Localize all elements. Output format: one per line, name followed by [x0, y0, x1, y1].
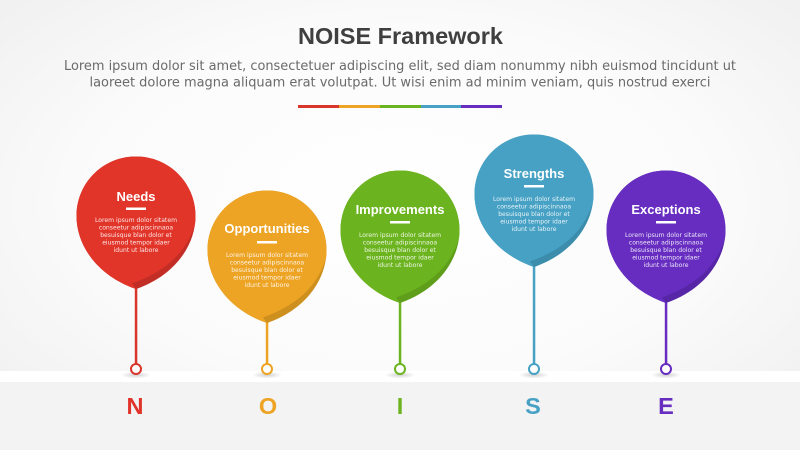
- acronym letters: [127, 393, 674, 419]
- panel: Improvements balloon: Improvements: [356, 202, 444, 217]
- panel: Opportunities balloon: [208, 190, 326, 378]
- panel: Opportunities balloon: Opportunities: [224, 221, 310, 236]
- panel: Exceptions balloon: Exceptions: [631, 202, 701, 217]
- subtitle text: [64, 59, 736, 90]
- panel: Opportunities balloon: eiusmod tempor idaer: [233, 274, 301, 282]
- panel: Strengths balloon: Lorem ipsum dolor sitatem: [493, 196, 575, 203]
- panel: Exceptions balloon: conseetur adipiscinnaoa: [629, 240, 703, 246]
- panel: Opportunities balloon: idunt ut labore: [245, 282, 290, 289]
- panel: Needs balloon: Needs: [116, 189, 156, 204]
- panel: Improvements balloon: eiusmod tempor idaer: [366, 254, 434, 262]
- panel: Exceptions balloon: Lorem ipsum dolor sitatem: [625, 232, 707, 239]
- panel: Exceptions balloon: eiusmod tempor idaer: [632, 254, 700, 262]
- panel: Exceptions balloon: idunt ut labore: [644, 262, 689, 269]
- acronym letters: O: [259, 393, 277, 419]
- panel: Improvements balloon: Lorem ipsum dolor sitatem: [359, 232, 441, 239]
- panel: Exceptions balloon: [606, 170, 726, 378]
- panel: Needs balloon: idunt ut labore: [114, 247, 159, 254]
- panel: Needs balloon: Lorem ipsum dolor sitatem: [95, 217, 177, 224]
- panel: Needs balloon: [76, 156, 196, 378]
- multicolour title underline: [298, 105, 502, 108]
- acronym letters: I: [397, 393, 403, 419]
- subtitle text: laoreet dolore magna aliquam erat volutpat. Ut wisi enim ad minim veniam, quis nostrud exerci: [90, 76, 710, 90]
- panel: Strengths balloon: eiusmod tempor idaer: [500, 218, 568, 226]
- subtitle text: Lorem ipsum dolor sit amet, consectetuer adipiscing elit, sed diam nonummy nibh euismod tincidunt ut: [64, 59, 736, 74]
- acronym letters: E: [658, 393, 674, 419]
- panel: Improvements balloon: besuisque blan dolor et: [364, 247, 436, 254]
- panel: Improvements balloon: idunt ut labore: [378, 262, 423, 269]
- panel: Needs balloon: besuisque blan dolor et: [100, 232, 172, 239]
- panel: Strengths balloon: [474, 134, 594, 378]
- panel: Exceptions balloon: besuisque blan dolor et: [630, 247, 702, 254]
- panel: Opportunities balloon: Lorem ipsum dolor sitatem: [226, 252, 308, 259]
- acronym letters: N: [127, 393, 143, 419]
- panel: Needs balloon: conseetur adipiscinnaoa: [99, 224, 173, 232]
- panel: Opportunities balloon: conseetur adipiscinnaoa: [230, 260, 304, 266]
- acronym letters: S: [525, 393, 541, 419]
- panel: Strengths balloon: idunt ut labore: [512, 226, 557, 233]
- panel: Opportunities balloon: besuisque blan dolor et: [231, 267, 303, 274]
- panel: Improvements balloon: conseetur adipiscinnaoa: [363, 240, 437, 246]
- panel: Improvements balloon: [340, 170, 460, 378]
- panel: Strengths balloon: besuisque blan dolor et: [498, 211, 570, 218]
- panel: Strengths balloon: Strengths: [504, 166, 564, 181]
- title: NOISE Framework: [298, 23, 503, 49]
- white floor band: [0, 371, 800, 382]
- panel: Strengths balloon: conseetur adipiscinnaoa: [497, 204, 571, 210]
- panel: Needs balloon: eiusmod tempor idaer: [102, 240, 170, 246]
